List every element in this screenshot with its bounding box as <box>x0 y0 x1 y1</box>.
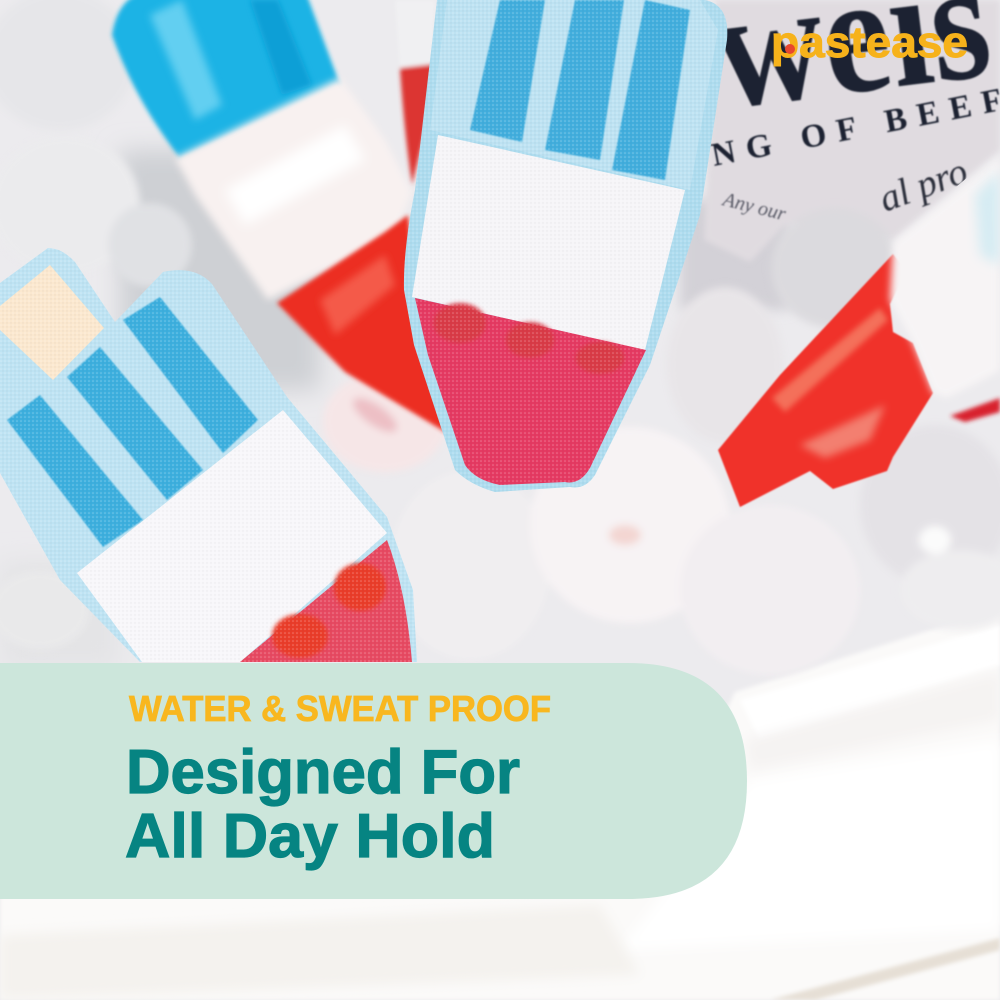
heading: Designed For <box>126 738 520 807</box>
sticker: centre popsicle pastie <box>404 0 727 492</box>
beer can with label text: al pro <box>874 150 973 220</box>
sticker: left popsicle pastie <box>0 248 417 662</box>
eyebrow: water and sweat proof: WATER & SWEAT PROOF <box>129 688 551 729</box>
real popsicle top centre-back <box>395 0 435 185</box>
heading: All Day Hold <box>125 802 495 871</box>
cooler rim <box>0 608 1000 1000</box>
real popsicle right <box>718 157 1000 507</box>
beer can with label text: NG OF BEEF <box>709 82 1000 174</box>
heading <box>125 738 520 871</box>
ice cube in front of can <box>771 208 899 328</box>
beer can with label text: Any our <box>719 188 788 225</box>
brand logo: pastease <box>771 18 968 67</box>
beer can with label text <box>704 0 1000 262</box>
real popsicle left: blue white red <box>112 0 447 433</box>
ice cubes <box>0 0 1000 675</box>
text panel <box>0 663 747 899</box>
